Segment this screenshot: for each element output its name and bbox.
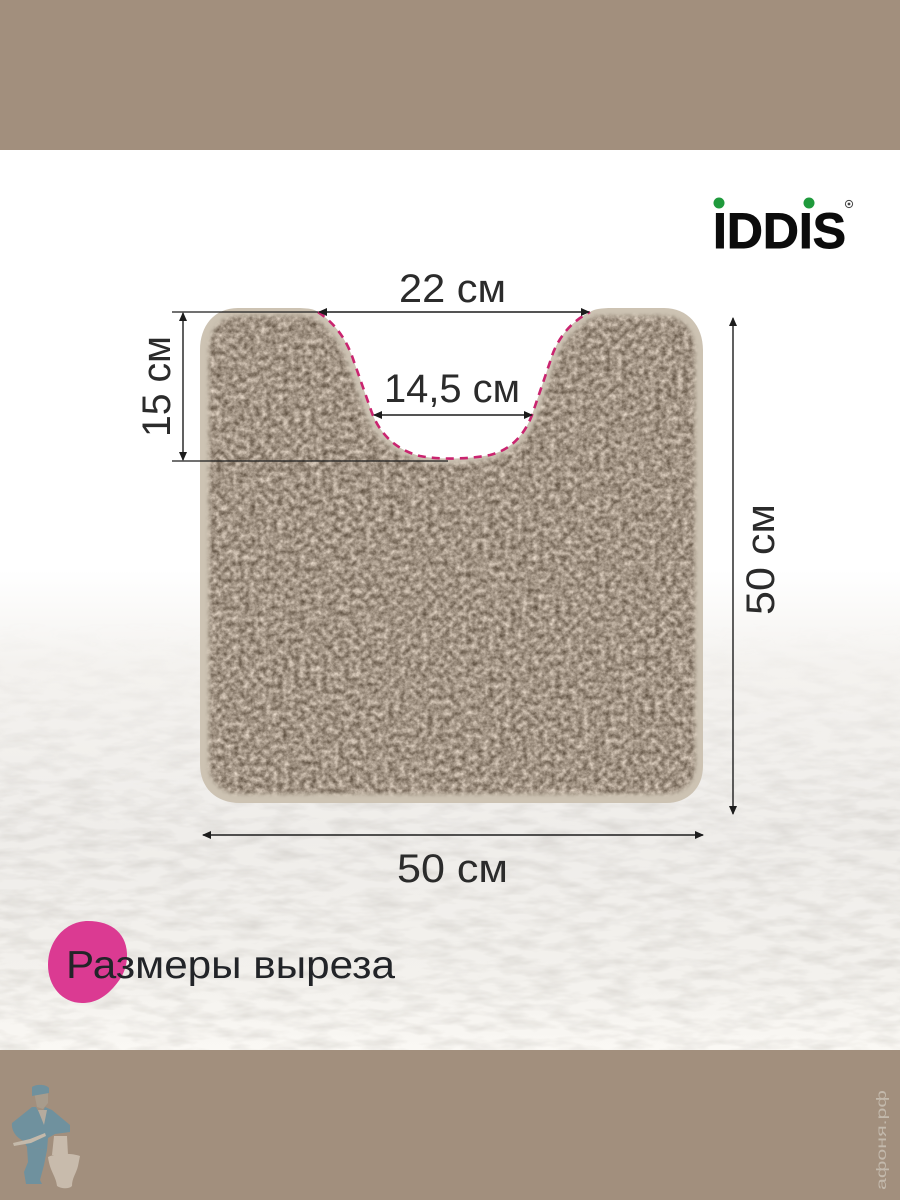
- logo dot right: [804, 198, 814, 208]
- cutout pink dashed outline: [318, 312, 590, 459]
- caption text: Размеры выреза: [66, 944, 395, 987]
- logo dot left: [714, 198, 724, 208]
- dimension: 14,5 cm: 14,5 см: [384, 367, 520, 411]
- plumber jacket: [12, 1107, 70, 1150]
- watermark: афоня.рф: [873, 1090, 889, 1190]
- dimension: 15 cm: 15 см: [135, 336, 179, 437]
- logo: IDDIS: IDDIS: [713, 203, 846, 259]
- dimension: 50 cm width: 50 см: [397, 847, 508, 891]
- icon: plumber with toilet: [12, 1085, 80, 1188]
- toilet tank: [52, 1136, 68, 1155]
- caption with pink blob: [48, 921, 395, 1003]
- plumber shirt: [38, 1110, 47, 1125]
- plumber cap: [32, 1085, 49, 1096]
- plumber legs: [24, 1147, 47, 1184]
- dimension: 22 cm: 22 см: [399, 267, 506, 311]
- background: white fur: [0, 618, 900, 1050]
- plumber head: [34, 1092, 48, 1109]
- bath mat with toilet cutout: [190, 300, 720, 820]
- bottom band: [0, 1050, 900, 1200]
- wrench: [13, 1133, 46, 1146]
- top band: [0, 0, 900, 150]
- toilet bowl: [48, 1154, 80, 1188]
- pink blob: [48, 921, 127, 1003]
- logo registered mark: [845, 200, 853, 208]
- dimension: 50 cm height: 50 см: [739, 504, 783, 615]
